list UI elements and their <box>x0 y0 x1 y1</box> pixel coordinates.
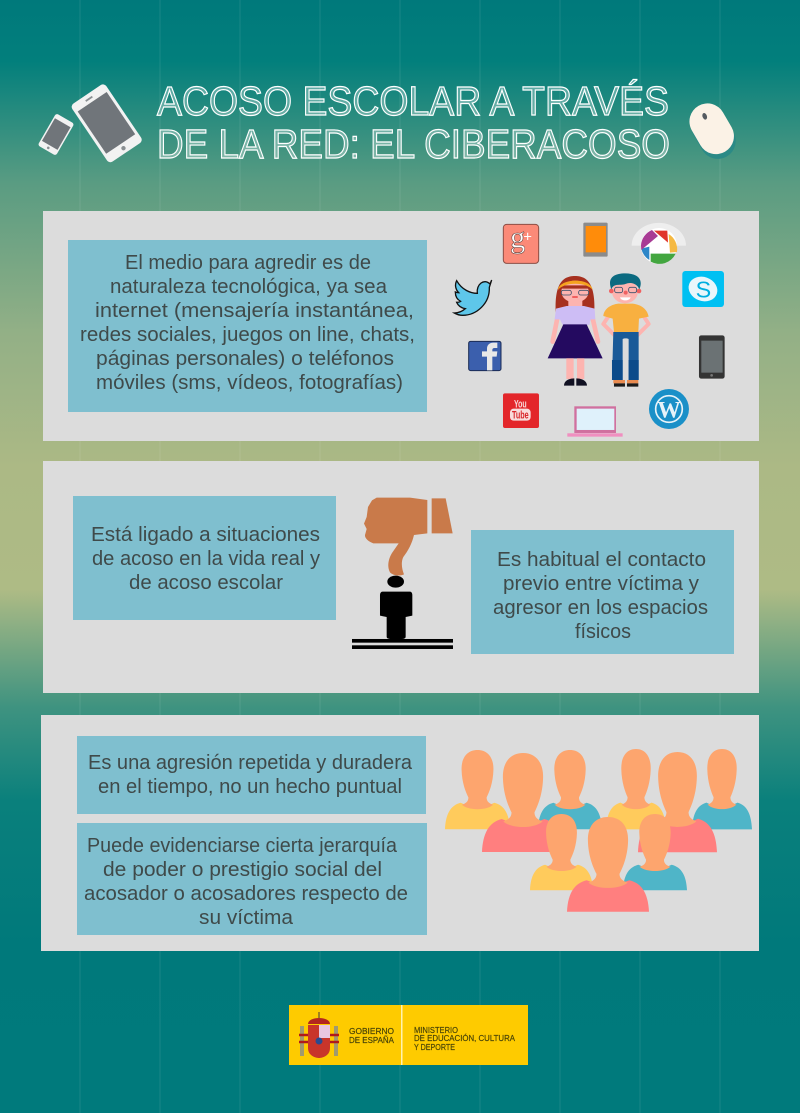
icon: tablet <box>583 223 608 257</box>
icon: facebook <box>469 341 501 371</box>
text: Gobierno de España <box>349 1026 394 1045</box>
title <box>157 78 670 167</box>
illustration: girl <box>548 276 603 386</box>
icons: social networks and devices <box>454 220 725 437</box>
text block: power hierarchy: su víctima <box>199 907 294 929</box>
text block: power hierarchy: de poder o prestigio social del <box>103 859 382 881</box>
panel: repetition and hierarchy <box>41 715 759 951</box>
icon: picasa <box>632 223 686 264</box>
text block: technological medium: naturaleza tecnológica, ya sea <box>110 276 388 298</box>
text block: technological medium: páginas personales) o teléfonos <box>96 348 394 370</box>
icon: mobile phone <box>699 335 725 379</box>
text block: real life: Está ligado a situaciones <box>91 524 320 546</box>
text block: prior contact: previo entre víctima y <box>503 573 699 595</box>
text: Gobierno de España: DE ESPAÑA <box>349 1035 394 1045</box>
icon: youtube: Tube <box>512 410 529 422</box>
icon: thumb down over person <box>352 498 453 649</box>
text block: technological medium <box>68 240 427 412</box>
text: Gobierno de España: GOBIERNO <box>349 1026 394 1036</box>
icon: laptop <box>567 406 623 437</box>
text block: prior contact: agresor en los espacios <box>493 597 708 619</box>
icon: google plus: g <box>510 220 525 254</box>
panel: link with real-life bullying <box>43 461 759 693</box>
text block: technological medium: redes sociales, juegos on line, chats, <box>80 324 415 346</box>
text block: real life: de acoso en la vida real y <box>92 548 320 570</box>
text block: power hierarchy <box>77 823 427 935</box>
title: DE LA RED: EL CIBERACOSO <box>157 121 670 167</box>
text: Ministerio de Educación, Cultura y Deporte: MINISTERIO <box>414 1025 458 1035</box>
illustration: group of people <box>445 749 752 912</box>
icon: coat of arms <box>299 1012 339 1058</box>
text block: power hierarchy: Puede evidenciarse cierta jerarquía <box>87 835 398 857</box>
icon: google plus <box>503 220 539 263</box>
text block: repeated aggression <box>77 736 426 814</box>
title: ACOSO ESCOLAR A TRAVÉS <box>157 78 669 124</box>
text block: repeated aggression: en el tiempo, no un hecho puntual <box>98 776 402 798</box>
text block: technological medium: El medio para agredir es de <box>125 252 371 274</box>
text block: technological medium: internet (mensajería instantánea, <box>95 300 414 322</box>
icon: skype: S <box>696 276 711 302</box>
icon: twitter <box>454 280 492 315</box>
icon: smartphones <box>38 83 143 164</box>
text: Ministerio de Educación, Cultura y Deporte: DE EDUCACIÓN, CULTURA <box>414 1033 515 1043</box>
icon: wordpress <box>649 389 689 429</box>
illustration: boy <box>603 273 649 387</box>
text: Ministerio de Educación, Cultura y Deporte <box>414 1025 515 1052</box>
text block: technological medium: móviles (sms, vídeos, fotografías) <box>96 372 403 394</box>
text block: real life: de acoso escolar <box>129 572 283 594</box>
icon: youtube <box>503 393 539 428</box>
logo: Gobierno de España, Ministerio <box>289 1005 528 1065</box>
text block: power hierarchy: acosador o acosadores respecto de <box>84 883 408 905</box>
icon: wordpress: W <box>657 397 681 423</box>
panel: medium of aggression <box>43 211 759 441</box>
icon: computer mouse <box>683 97 742 165</box>
text block: prior contact: físicos <box>575 621 631 643</box>
icon: youtube: You <box>514 398 527 410</box>
text block: repeated aggression: Es una agresión repetida y duradera <box>88 752 413 774</box>
text block: real life <box>73 496 336 620</box>
text block: prior contact <box>471 530 734 654</box>
text: Ministerio de Educación, Cultura y Deporte: Y DEPORTE <box>414 1042 455 1052</box>
icon: skype <box>682 271 724 307</box>
icon: google plus: + <box>523 230 532 246</box>
text block: prior contact: Es habitual el contacto <box>497 549 706 571</box>
